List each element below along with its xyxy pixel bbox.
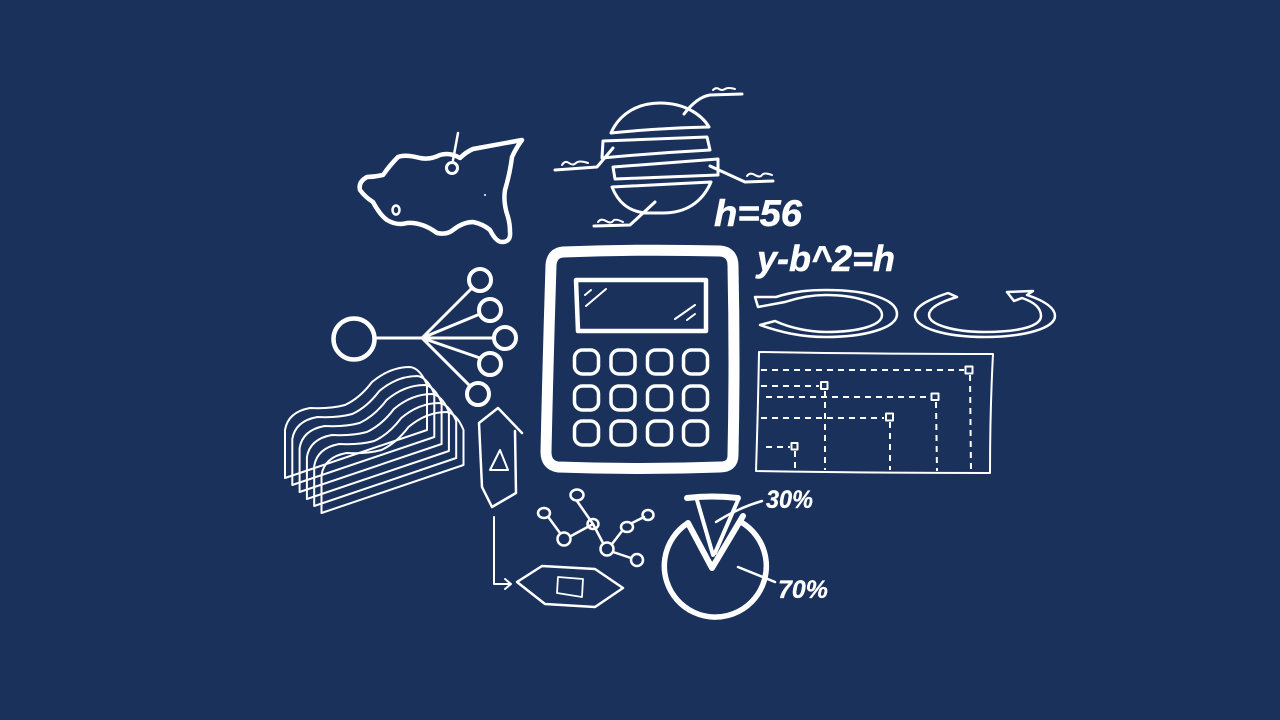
icon: hub with five branching nodes xyxy=(334,269,516,405)
icon: stacked wavy layers xyxy=(285,367,464,513)
chart: dashed step plot in a frame xyxy=(756,352,993,473)
formula: h=56: h=56 xyxy=(714,193,802,234)
icon: tall hexagon with triangle xyxy=(479,408,522,507)
icon: molecule network xyxy=(538,490,654,566)
label: 30%: 30% xyxy=(766,486,813,514)
arrow: right circular arrow xyxy=(915,291,1055,337)
icon: map with location pin xyxy=(360,133,522,242)
chart: pie with 30% and 70% labels xyxy=(664,486,828,617)
icon: calculator xyxy=(546,250,734,468)
formula: y-b^2=h: y-b^2=h xyxy=(755,238,895,279)
icon: flat hexagon with square xyxy=(517,566,623,607)
arrow: hexagon flow connector xyxy=(494,517,511,589)
icon: exploded sphere diagram with labels xyxy=(555,88,773,226)
label: 70%: 70% xyxy=(778,576,828,604)
arrow: left circular arrow xyxy=(755,290,897,337)
